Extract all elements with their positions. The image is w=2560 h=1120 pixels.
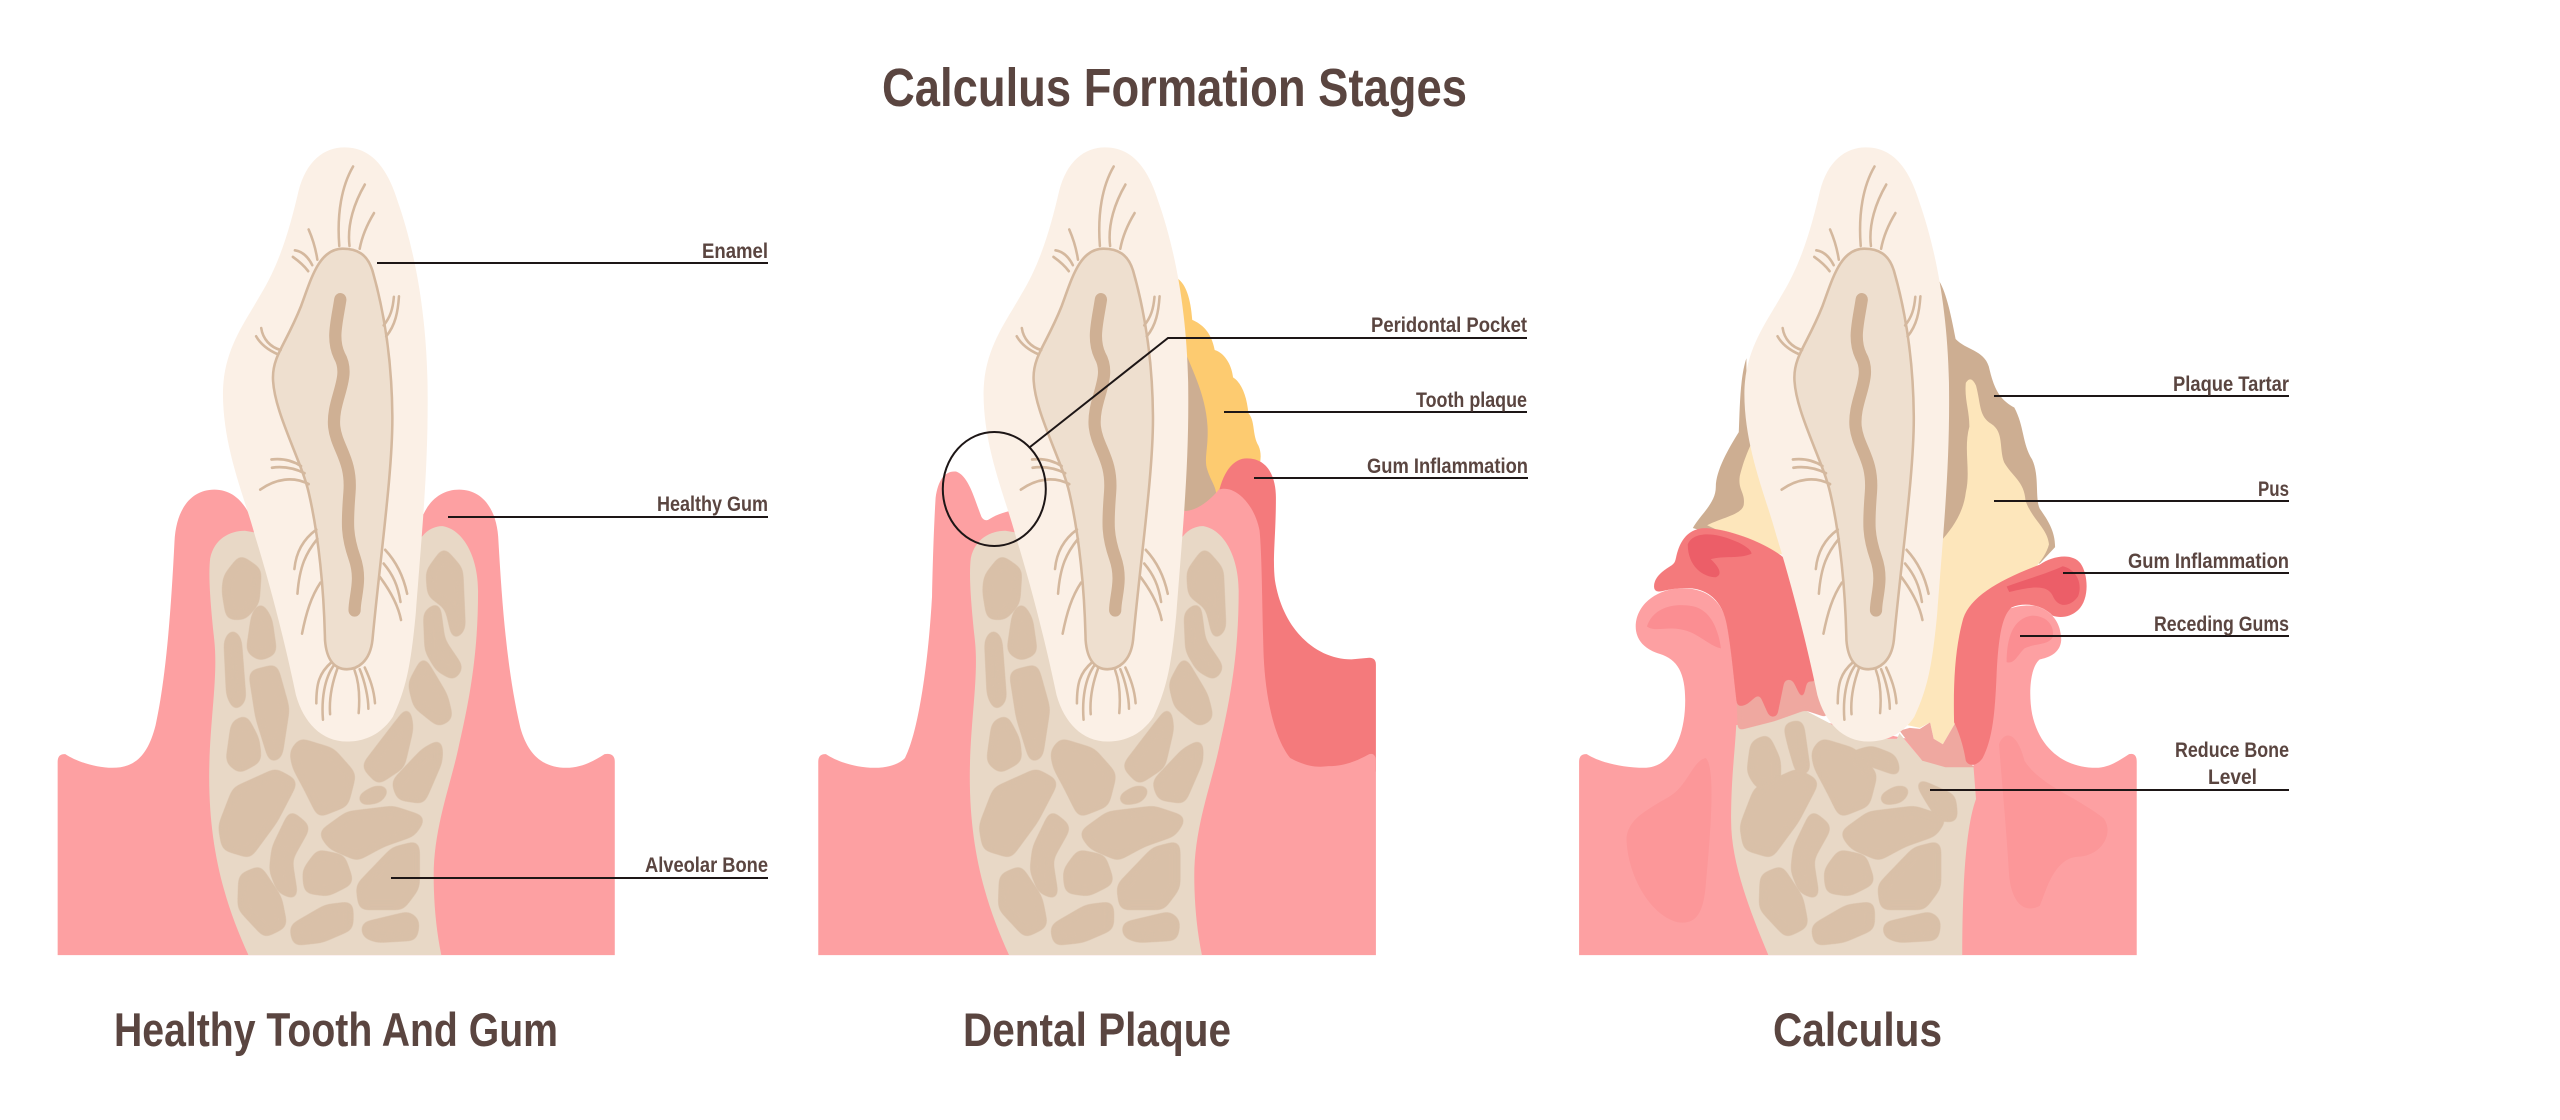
faded tissue peach right — [1899, 721, 1974, 767]
label: Healthy Gum: Healthy Gum — [657, 493, 768, 516]
label: Gum Inflammation (calculus): Gum Inflammation — [2128, 550, 2289, 573]
alveolar bone and tooth — [970, 147, 1239, 955]
heading: Healthy Tooth And Gum: Healthy Tooth And Gum — [114, 1003, 558, 1056]
label: Reduce Bone Level — [1930, 739, 2289, 790]
label: Receding Gums: Receding Gums — [2154, 613, 2289, 636]
bone cells — [1751, 724, 1954, 818]
tooth plaque deposit — [1178, 279, 1261, 514]
tooth — [1744, 147, 1949, 742]
gum receding shape — [1579, 588, 2137, 955]
gum shape with pocket — [818, 471, 1376, 955]
tartar right — [1938, 279, 2055, 564]
inflamed gum left — [1654, 528, 1816, 717]
label: Peridontal Pocket: Peridontal Pocket — [1371, 314, 1527, 337]
heading: Calculus: Calculus — [1773, 1003, 1942, 1056]
heading: Dental Plaque: Dental Plaque — [963, 1003, 1231, 1056]
panel: calculus — [1579, 147, 2137, 955]
reduced alveolar bone — [1731, 710, 1976, 955]
bone cells upper — [226, 553, 462, 800]
faded tissue peach left — [1736, 668, 1828, 731]
label: Enamel: Enamel — [702, 240, 768, 263]
label: Gum Inflammation: Gum Inflammation — [1367, 455, 1528, 478]
tartar build-up under plaque — [1183, 355, 1216, 513]
pus right — [1907, 379, 2049, 744]
healthy gum shape — [58, 490, 615, 955]
label: Reduce Bone Level: Reduce Bone — [2175, 739, 2289, 762]
inflamed gum right — [1954, 556, 2087, 765]
label: Reduce Bone Level: Level — [2208, 766, 2257, 789]
tooth — [223, 147, 428, 742]
callout: periodontal pocket circle — [943, 432, 1046, 546]
title: Calculus Formation Stages — [882, 58, 1467, 118]
bone cells lower — [1743, 743, 1942, 941]
panel: healthy tooth and gum — [58, 147, 615, 955]
bone cells lower — [222, 743, 421, 941]
inflamed spot right — [2007, 566, 2080, 605]
label: Alveolar Bone: Alveolar Bone — [645, 854, 768, 877]
inflamed gum — [1219, 458, 1376, 772]
label: Tooth plaque: Tooth plaque — [1416, 389, 1527, 412]
tartar left — [1693, 358, 1774, 547]
pus left — [1707, 443, 1795, 558]
alveolar bone — [209, 526, 478, 955]
gum tint blotches — [1627, 735, 2108, 923]
label: Peridontal Pocket — [1030, 314, 1527, 447]
panel: dental plaque — [818, 147, 1376, 955]
label: Pus: Pus — [2258, 478, 2289, 501]
label: Plaque Tartar: Plaque Tartar — [2173, 373, 2289, 396]
inflamed spot left — [1688, 534, 1752, 577]
receding gum lobes — [1647, 605, 2053, 663]
